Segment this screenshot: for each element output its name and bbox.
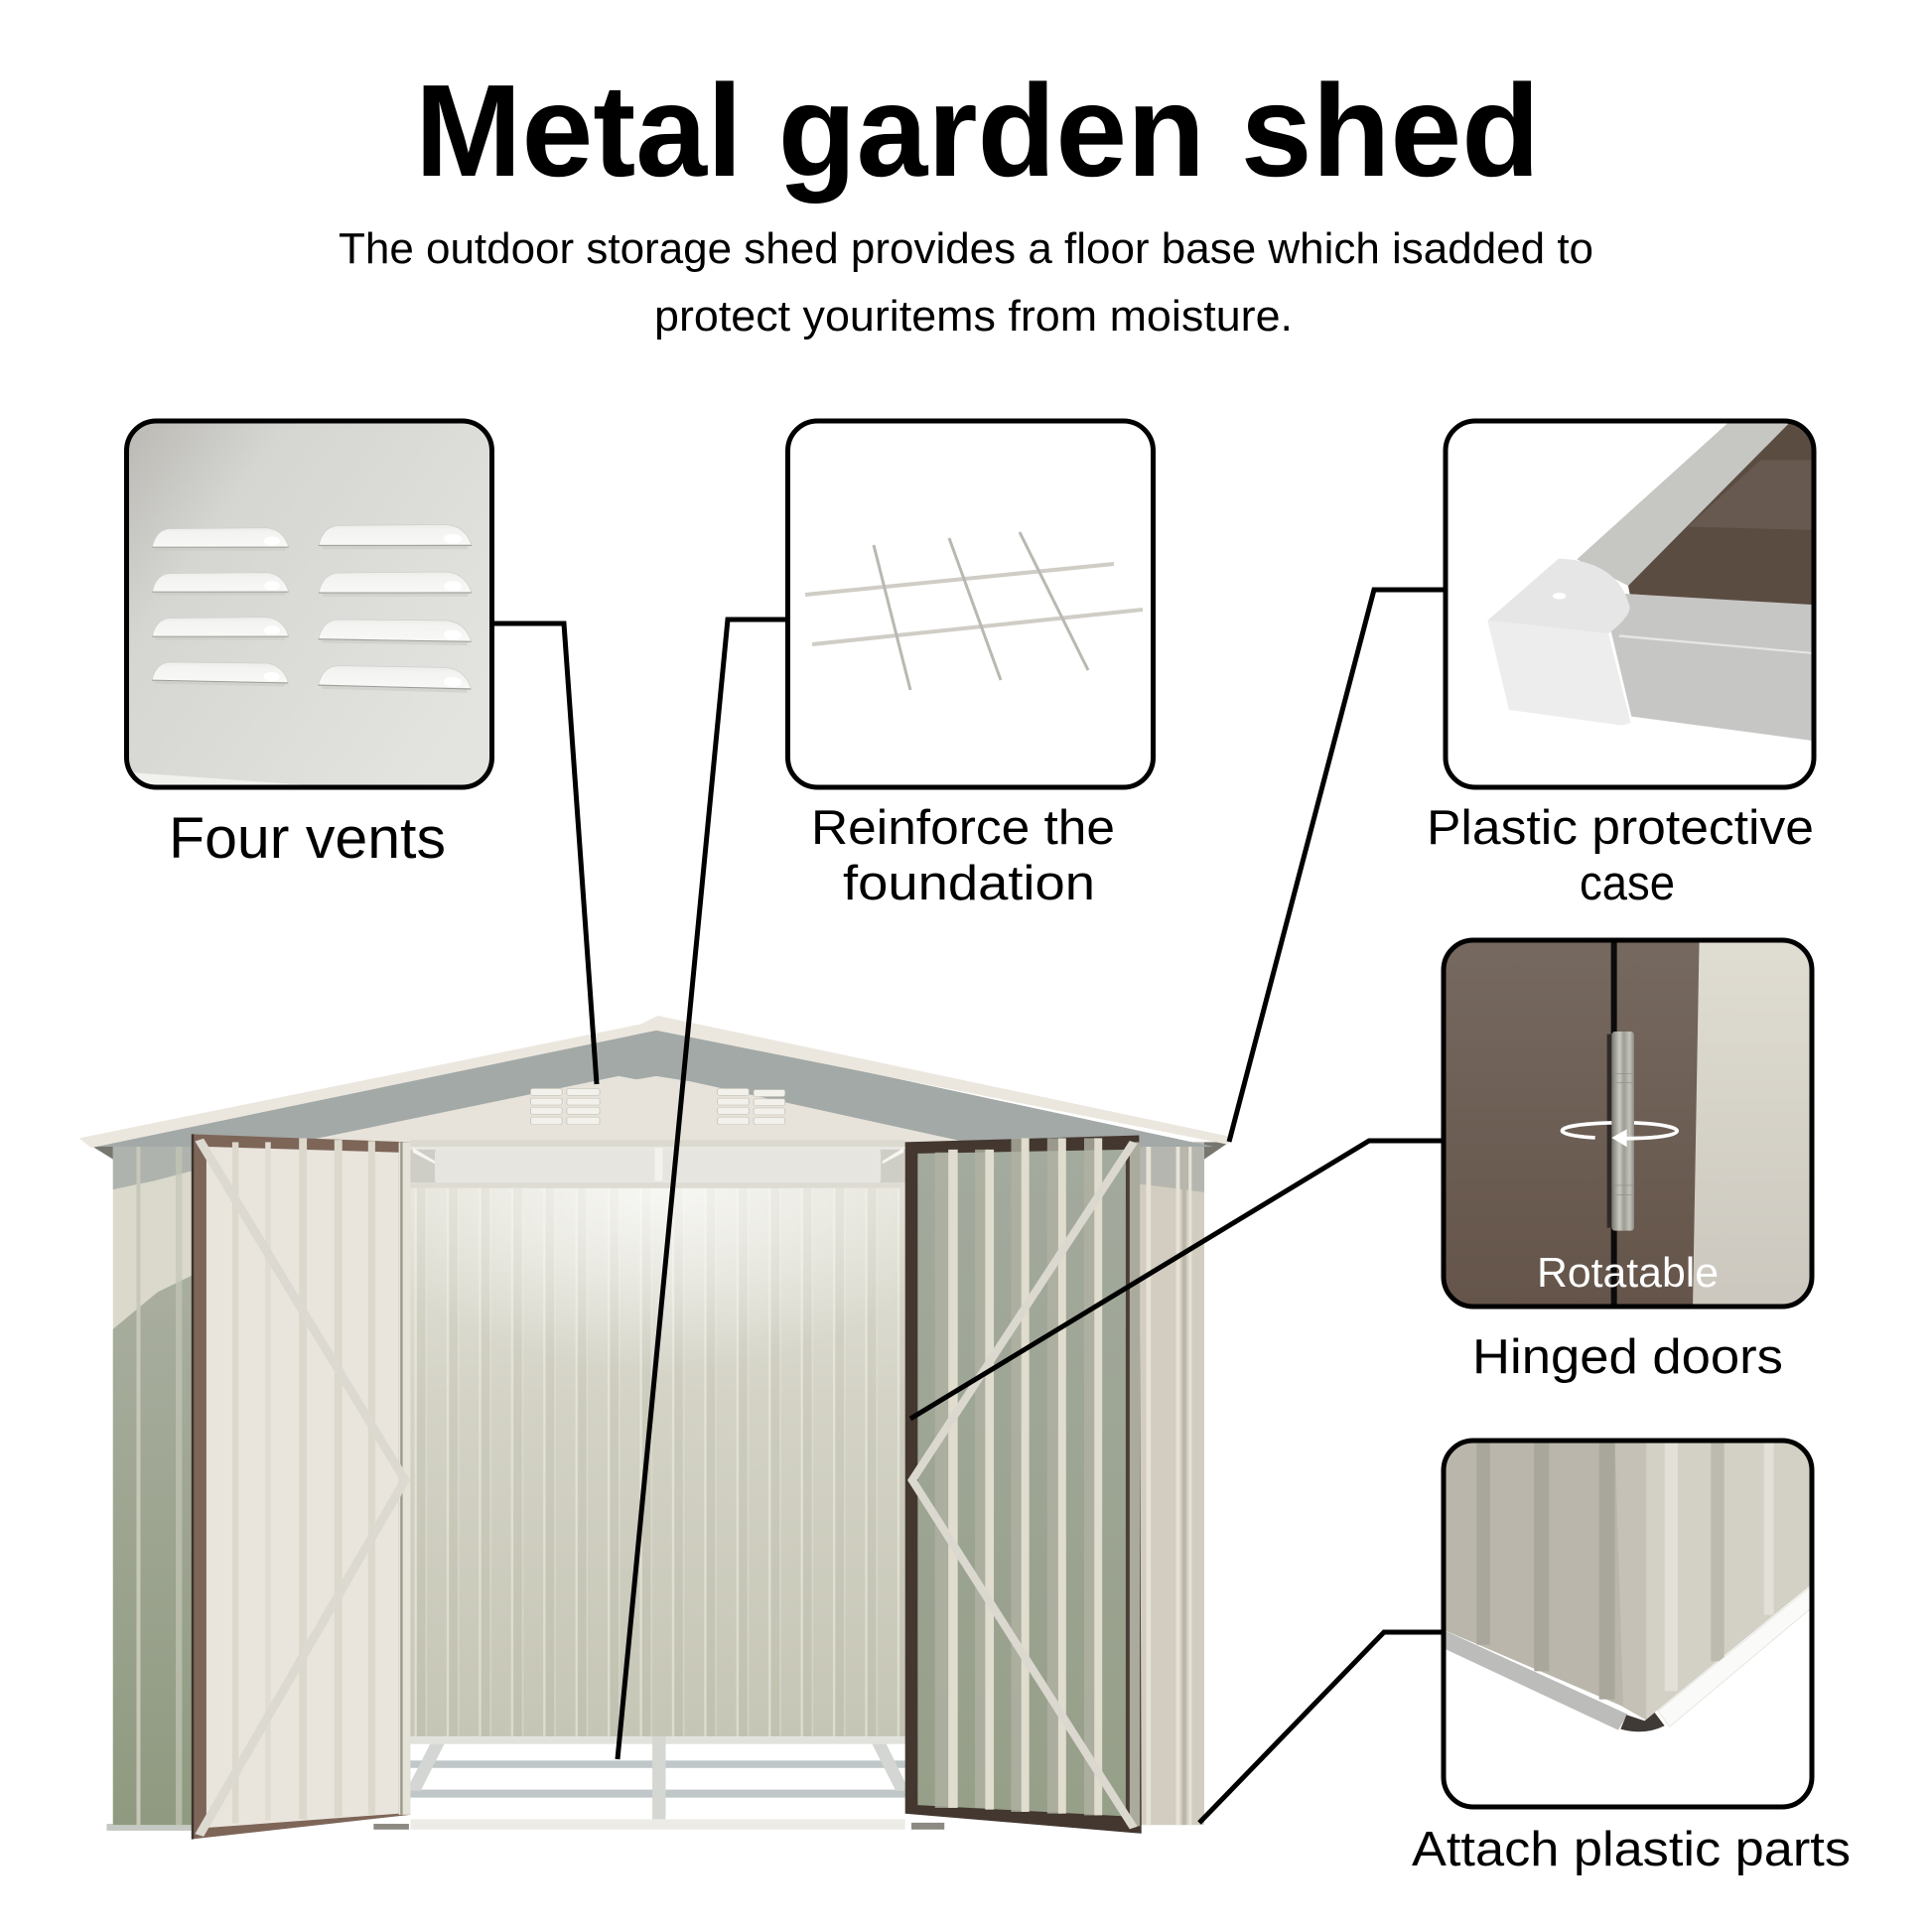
gable <box>91 1027 1213 1147</box>
label: plastic protective case: Plastic protective <box>1427 801 1814 855</box>
white base strip <box>1658 1582 1817 1726</box>
eave corners <box>91 1142 1229 1160</box>
rotatable label: Rotatable <box>1537 1249 1719 1296</box>
label: reinforce the foundation: foundation <box>843 857 1095 910</box>
connector: vents <box>493 623 597 1084</box>
ground shadow and feet <box>106 1823 944 1831</box>
left side wall <box>113 1142 193 1825</box>
label: hinged doors: Hinged doors <box>1472 1330 1783 1384</box>
label: reinforce the foundation <box>811 801 1115 910</box>
panel: four vents <box>124 419 493 789</box>
label: reinforce the foundation: Reinforce the <box>811 801 1115 855</box>
title: Metal garden shed <box>415 58 1540 204</box>
panel: attach plastic parts <box>1440 1440 1817 1807</box>
panel: reinforce the foundation <box>788 421 1154 787</box>
panel: plastic protective case <box>1446 420 1817 787</box>
icon: foundation grid <box>805 532 1143 690</box>
subtitle: protect youritems from moisture. <box>654 292 1293 341</box>
connector: plastic parts <box>1199 1632 1442 1823</box>
connector: hinge <box>910 1141 1442 1419</box>
label: plastic protective case <box>1427 801 1814 910</box>
connector: plastic case <box>1229 590 1444 1142</box>
subtitle <box>339 224 1593 341</box>
shed illustration <box>79 1016 1229 1840</box>
subtitle: The outdoor storage shed provides a floor base which isadded to <box>339 224 1593 273</box>
label: four vents: Four vents <box>169 806 446 871</box>
label: attach plastic parts: Attach plastic parts <box>1412 1823 1851 1876</box>
roof trim <box>79 1016 1229 1148</box>
right side wall <box>1139 1142 1204 1825</box>
interior back wall and beam <box>410 1140 905 1736</box>
left door <box>192 1134 410 1840</box>
icon: vent louvres <box>152 524 472 693</box>
panel: hinged doors <box>1440 936 1817 1311</box>
connector: foundation <box>618 620 785 1759</box>
icon: white corner cap <box>1487 559 1631 726</box>
icon: hinge <box>1607 1032 1634 1231</box>
floor frame <box>410 1736 905 1830</box>
right door <box>905 1136 1142 1834</box>
black corner piece <box>1620 1713 1665 1731</box>
gable vents <box>530 1088 785 1125</box>
label: plastic protective case: case <box>1580 857 1675 910</box>
icon: rotation arrow <box>1562 1123 1677 1147</box>
